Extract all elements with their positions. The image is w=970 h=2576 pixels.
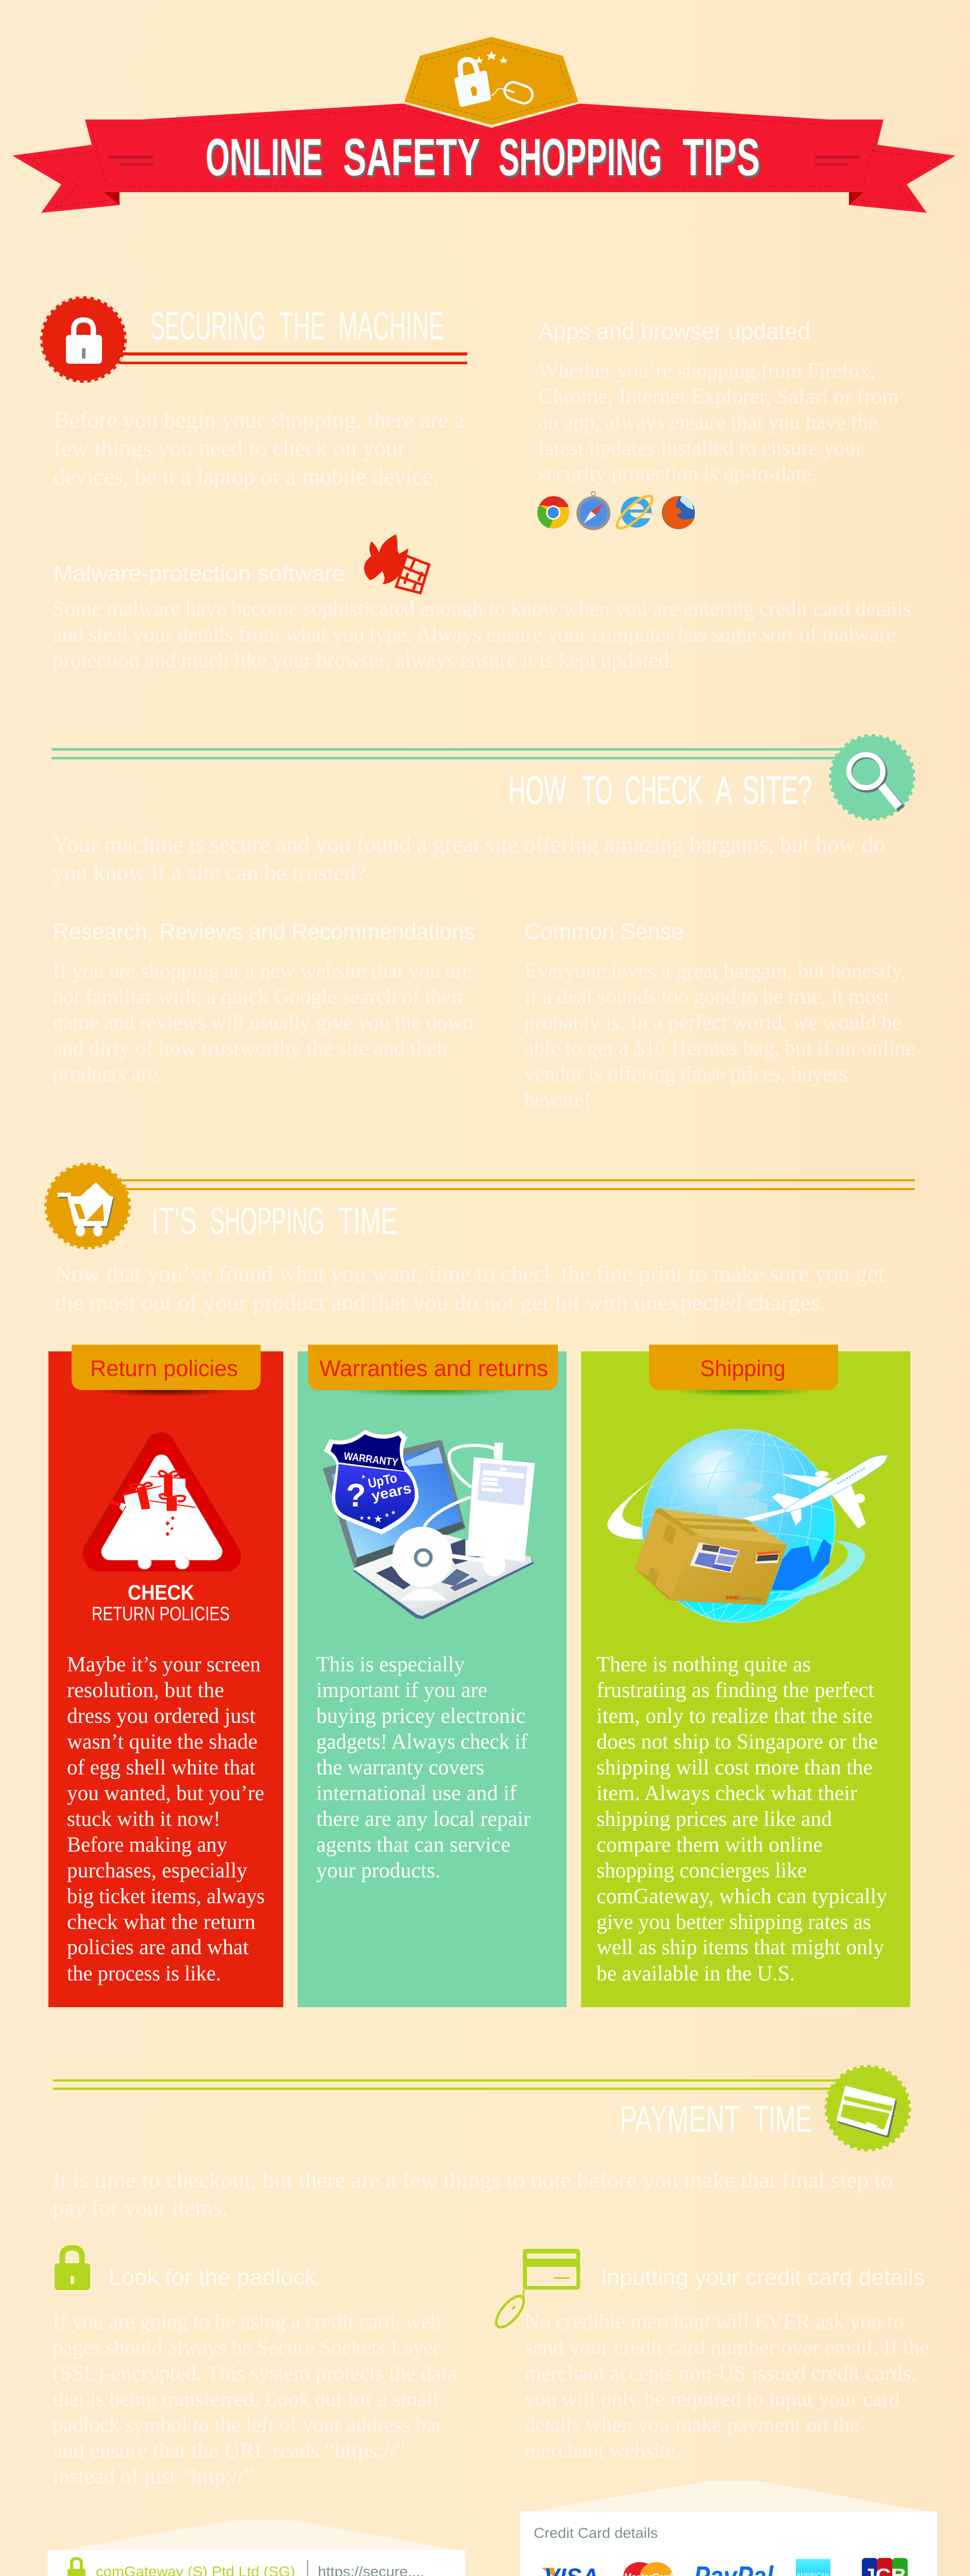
text: shipping: compare them with online	[597, 1833, 823, 1857]
text: return policies: the process is like.	[67, 1962, 221, 1986]
subheading: research: Research, Reviews and Recommendations	[53, 919, 475, 944]
text: warranties: important if you are	[316, 1679, 487, 1702]
text: credit card details: No credible merchant will EVER ask you to	[524, 2310, 904, 2334]
text: shipping: frustrating as finding the perfect	[597, 1679, 874, 1702]
text: padlock: that is being transferred. Look out for a small	[53, 2387, 438, 2411]
logo: american express	[796, 2559, 830, 2576]
panel: return policies	[48, 1345, 283, 2007]
text: padlock: pages should always be Secure Sockets Layer	[53, 2336, 440, 2360]
heading: TIME	[754, 2098, 812, 2140]
tab: shipping: Shipping	[700, 1356, 786, 1381]
text: return policies: purchases, especially	[67, 1859, 247, 1883]
title text	[206, 128, 760, 187]
sign caption: RETURN POLICIES	[92, 1603, 230, 1625]
icon: lime padlock	[55, 2248, 90, 2290]
heading: THE	[279, 304, 326, 348]
illustration: laptop with warranty shield: ?	[346, 1477, 366, 1514]
text: common sense: probably is. In a perfect world, we would be	[524, 1011, 901, 1035]
text: research	[53, 959, 473, 1086]
illustration: laptop with warranty shield: UpTo	[367, 1470, 398, 1491]
sign caption	[92, 1581, 230, 1625]
form heading: Credit Card details	[534, 2525, 658, 2541]
text: research: products are.	[53, 1062, 163, 1086]
illustration: laptop with warranty shield: ★	[390, 1509, 396, 1516]
intro text: the most out of your product and that you do not get hit with unexpected charges.	[55, 1290, 826, 1315]
text: common sense: beware!	[524, 1088, 591, 1112]
text: shipping: There is nothing quite as	[597, 1653, 811, 1676]
text: padlock: and ensure that the URL reads “https://”	[53, 2439, 405, 2463]
heading: MACHINE	[338, 304, 444, 348]
intro text: devices, be it a laptop or a mobile device.	[54, 463, 438, 489]
heading: SHOPPING	[210, 1199, 325, 1242]
tab: return policies: Return policies	[90, 1356, 238, 1381]
intro text	[53, 831, 885, 886]
tab: return policies	[72, 1345, 261, 1390]
logo: jcb	[862, 2558, 908, 2576]
intro text	[53, 2167, 893, 2221]
icon: browser logos	[537, 492, 695, 533]
tab: warranties and returns	[308, 1345, 558, 1390]
icon: warning sign with gifts	[97, 1447, 227, 1569]
heading: IT'S	[151, 1199, 197, 1242]
title text: ONLINE	[206, 128, 322, 187]
text: padlock: padlock symbol to the left of your address bar	[53, 2413, 443, 2437]
text: return policies: of egg shell white that	[67, 1756, 256, 1780]
text: research: If you are shopping at a new website that you are	[53, 959, 472, 983]
heading: HOW	[508, 768, 566, 812]
heading: CHECK	[625, 768, 702, 812]
text: return policies: check what the return	[67, 1910, 256, 1934]
intro text: Your machine is secure and you found a great site offering amazing bargains, but how do	[53, 831, 885, 857]
heading: A	[716, 768, 732, 812]
title text: SHOPPING	[499, 128, 662, 187]
panel: warranties and returns	[298, 1345, 567, 2007]
section: it's shopping time	[46, 1164, 915, 2007]
text: warranties: buying pricey electronic	[316, 1704, 525, 1728]
text: shipping: well as ship items that might only	[597, 1936, 884, 1959]
heading	[508, 768, 812, 812]
text: shipping: does not ship to Singapore or the	[597, 1730, 878, 1754]
panel: shipping	[581, 1345, 910, 2007]
heading: PAYMENT	[620, 2098, 740, 2140]
icon: orange badge with cart	[46, 1164, 129, 1248]
section: how to check a site	[52, 736, 915, 1112]
tab: warranties and returns: Warranties and returns	[319, 1356, 548, 1381]
title text: TIPS	[683, 128, 760, 187]
illustration: laptop with warranty shield	[323, 1430, 535, 1619]
text: credit card details: merchant accepts non-US issued credit cards,	[524, 2362, 916, 2385]
sign caption: CHECK	[128, 1581, 194, 1604]
intro text: you know if a site can be trusted?	[53, 859, 366, 886]
text: apps and browser: Chrome, Internet Explorer, Safari or from	[538, 385, 899, 409]
text: credit card details: merchant website.	[524, 2439, 680, 2463]
text: research: name and reviews will usually give you the down	[53, 1011, 473, 1035]
text: warranties: gadgets! Always check if	[316, 1730, 527, 1754]
text: return policies: dress you ordered just	[67, 1704, 256, 1728]
text: malware	[53, 597, 911, 672]
text: warranties: international use and if	[316, 1782, 517, 1805]
icon: lime badge with credit card	[826, 2066, 910, 2150]
text: padlock: If you are going to be using a credit card, web	[53, 2310, 441, 2334]
icon: credit card and mouse	[491, 2249, 580, 2332]
address bar mockup	[47, 2520, 466, 2576]
text: research: not familiar with, a quick Google search of their	[53, 985, 464, 1009]
text: apps and browser: latest updates installed to ensure your	[538, 436, 863, 460]
text: credit card details: details when you make payment on the	[524, 2413, 859, 2437]
text: warranties: the warranty covers	[316, 1756, 484, 1780]
subheading: common sense: Common Sense	[524, 919, 684, 944]
text: common sense: Everyone loves a great bargain, but honestly,	[524, 959, 906, 983]
subheading: malware: Malware-protection software	[54, 561, 345, 586]
tab: shipping	[649, 1345, 838, 1390]
text: common sense: vendor is offering those prices, buyers	[524, 1062, 847, 1086]
heading: TO	[582, 768, 612, 812]
text: return policies: resolution, but the	[67, 1679, 224, 1702]
icon: padlock	[67, 2558, 86, 2576]
text: warranties: agents that can service	[316, 1833, 510, 1857]
illustration: laptop with warranty shield: WARRANTY	[343, 1450, 399, 1468]
section: securing the machine	[42, 298, 911, 672]
intro text: few things you need to check on your	[54, 435, 405, 461]
text: shipping: give you better shipping rates as	[597, 1910, 871, 1934]
illustration: laptop with warranty shield: *	[361, 1473, 366, 1483]
text: return policies	[67, 1653, 265, 1986]
text: apps and browser: Whether you’re shopping from Firefox,	[538, 359, 875, 383]
heading: SITE?	[742, 768, 812, 812]
illustration: laptop with warranty shield: ★ ★	[359, 1515, 371, 1521]
text: common sense	[524, 959, 915, 1112]
text: malware: and steal your details from what you type. Always ensure your computer has some sort of malware	[53, 623, 896, 647]
icon: red badge with padlock	[42, 298, 125, 381]
text: padlock: (SSL)-encrypted. This system protects the data	[53, 2362, 457, 2385]
icon: flame and firewall	[364, 534, 429, 593]
intro text: Before you begin your shopping, there are a	[54, 406, 465, 433]
heading: TIME	[338, 1199, 397, 1242]
icon: gold hexagon badge with padlock and mouse	[404, 37, 581, 128]
illustration: laptop with warranty shield: ★	[384, 1512, 389, 1518]
section: payment time	[47, 2066, 938, 2576]
text: apps and browser	[538, 359, 899, 486]
text: padlock: instead of just “http://”	[53, 2465, 253, 2488]
title text: SAFETY	[343, 128, 480, 187]
text: malware: Some malware have become sophisticated enough to know when you are entering credit card details	[53, 597, 911, 621]
heading: SECURING	[150, 304, 266, 348]
text: shipping: shopping concierges like	[597, 1859, 807, 1883]
credit card form mockup	[520, 2481, 938, 2576]
text: return policies: Before making any	[67, 1833, 227, 1857]
text: research: and dirty of how trustworthy the site and their	[53, 1037, 450, 1060]
text: apps and browser: security protection is up-to-date.	[538, 462, 816, 486]
text: common sense: able to get a $10 Hermes bag, but if an online	[524, 1037, 915, 1060]
text: credit card details: send your credit card number over email. If the	[524, 2336, 929, 2360]
intro text	[54, 406, 465, 489]
text: warranties: there are any local repair	[316, 1807, 531, 1831]
intro text: It is time to checkout, but there are a few things to note before you make that final step to	[53, 2167, 893, 2193]
illustration: globe, plane and parcel: comGateway	[726, 1594, 762, 1602]
text: return policies: Maybe it’s your screen	[67, 1653, 261, 1676]
text: shipping	[597, 1653, 887, 1986]
text: apps and browser: an app, always ensure that you have the	[538, 411, 877, 434]
text: common sense: if a deal sounds too good to be true, it most	[524, 985, 890, 1009]
subheading: padlock: Look for the padlock	[109, 2265, 317, 2290]
text: credit card details: you will only be required to input your card	[524, 2387, 900, 2411]
text: warranties: your products.	[316, 1859, 440, 1883]
text: credit card details	[524, 2310, 929, 2463]
text: shipping: be available in the U.S.	[597, 1962, 795, 1986]
text: return policies: big ticket items, always	[67, 1885, 265, 1908]
text: return policies: stuck with it now!	[67, 1807, 220, 1831]
intro text	[55, 1261, 884, 1315]
text: warranties	[316, 1653, 531, 1883]
text: shipping: item. Always check what their	[597, 1782, 857, 1805]
red ribbon	[12, 104, 956, 213]
intro text: Now that you’ve found what you want, time to check the fine print to make sure you get	[55, 1261, 884, 1286]
text: shipping: item, only to realize that the site	[597, 1704, 873, 1728]
text: return policies: you wanted, but you’re	[67, 1782, 264, 1805]
title banner	[12, 37, 956, 213]
illustration: laptop with warranty shield: years	[370, 1480, 413, 1504]
text: warranties: This is especially	[316, 1653, 465, 1676]
intro text: pay for your items.	[53, 2195, 228, 2221]
text: return policies: policies are and what	[67, 1936, 249, 1959]
icon: green badge with magnifier	[830, 736, 914, 819]
illustration: globe, plane and parcel	[607, 1418, 888, 1634]
text: return policies: wasn’t quite the shade	[67, 1730, 258, 1754]
subheading: credit card details: Inputting your credit card details	[601, 2265, 925, 2290]
text: shipping: shipping prices are like and	[597, 1807, 832, 1831]
subheading: apps and browser: Apps and browser updated	[538, 319, 810, 344]
text: shipping: shipping will cost more than the	[597, 1756, 873, 1780]
text: malware: protection and much like your browser, always ensure it is kept updated.	[53, 649, 674, 672]
illustration: laptop with warranty shield: ★	[373, 1513, 383, 1525]
logo: mastercard	[623, 2562, 673, 2576]
text: shipping: comGateway, which can typically	[597, 1885, 887, 1908]
text: padlock	[53, 2310, 457, 2488]
